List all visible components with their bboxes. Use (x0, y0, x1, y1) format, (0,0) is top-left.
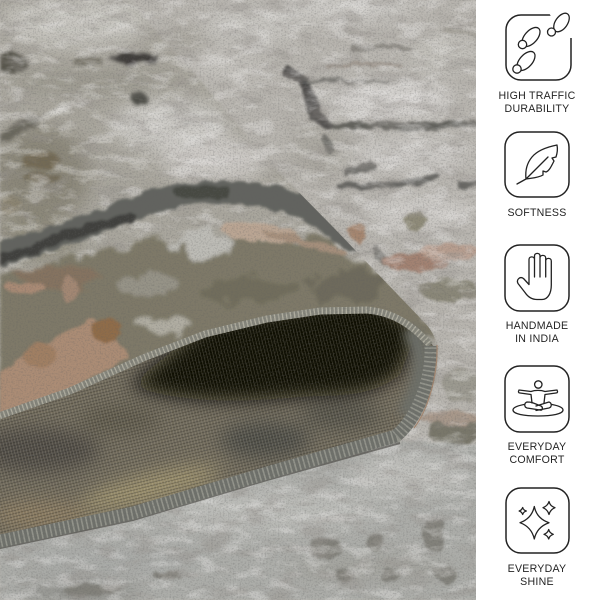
fine pile grain (0, 0, 476, 600)
icon: footprints (506, 10, 574, 80)
icon: feather (505, 132, 569, 197)
underside of the rug (0, 314, 433, 534)
label: high traffic durability: DURABILITY (505, 103, 569, 115)
rug hem edges (0, 310, 437, 549)
olive pile (0, 231, 430, 425)
feature: handmade in india (505, 245, 569, 345)
lower floor dark marks (60, 519, 457, 596)
dark band across the roll (0, 192, 350, 258)
white sidebar (476, 0, 600, 600)
dark blotches on the roll top (0, 52, 159, 213)
dark shadow inside the fold (130, 295, 418, 401)
icon: hand (505, 245, 569, 311)
lower part of the roll (0, 192, 430, 425)
feature: everyday shine (506, 488, 569, 588)
floor pattern: dark strokes (287, 30, 476, 262)
texture overlay on photo (0, 0, 476, 600)
icon: meditating figure (505, 366, 569, 432)
feature: softness (505, 132, 569, 219)
rolled rug surface (0, 0, 438, 372)
salmon patches (0, 217, 350, 420)
label: high traffic durability: HIGH TRAFFIC (499, 90, 575, 102)
lower floor rug (0, 441, 490, 600)
lower floor tonal patches (20, 455, 470, 600)
label: handmade in india: IN INDIA (515, 333, 560, 345)
feature: everyday comfort (505, 366, 569, 466)
label: everyday shine: EVERYDAY (508, 563, 566, 575)
label: everyday comfort: EVERYDAY (508, 441, 566, 453)
label: everyday comfort: COMFORT (509, 454, 565, 466)
label: handmade in india: HANDMADE (506, 320, 568, 332)
label: everyday shine: SHINE (520, 576, 554, 588)
feature: high traffic durability (499, 10, 576, 115)
icon: sparkles (506, 488, 569, 553)
label: softness: SOFTNESS (507, 207, 567, 219)
floor pattern: warm patches (350, 213, 482, 446)
